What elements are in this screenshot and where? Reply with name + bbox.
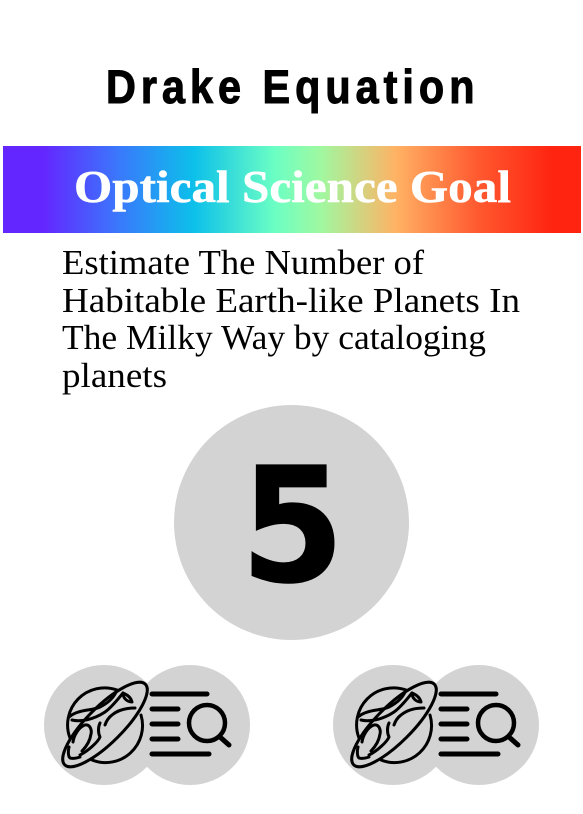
description text: planets — [62, 356, 167, 395]
title: Drake Equation — [106, 62, 479, 114]
icon: planet with ring — [341, 671, 447, 778]
icon: planet with ring — [52, 671, 158, 778]
banner heading: Optical Science Goal — [74, 162, 511, 212]
icon pair: right planet search — [333, 665, 539, 785]
icon pair: left planet search — [44, 665, 250, 785]
description text: The Milky Way by cataloging — [62, 318, 486, 357]
icon: list with magnifier — [152, 694, 229, 754]
description text: Habitable Earth-like Planets In — [62, 281, 520, 320]
number 5: 5 — [240, 434, 344, 619]
description text — [62, 243, 520, 395]
icon: list with magnifier — [441, 694, 518, 754]
description text: Estimate The Number of — [62, 243, 424, 282]
large number badge — [174, 405, 409, 640]
banner: rainbow gradient with heading — [3, 146, 581, 233]
